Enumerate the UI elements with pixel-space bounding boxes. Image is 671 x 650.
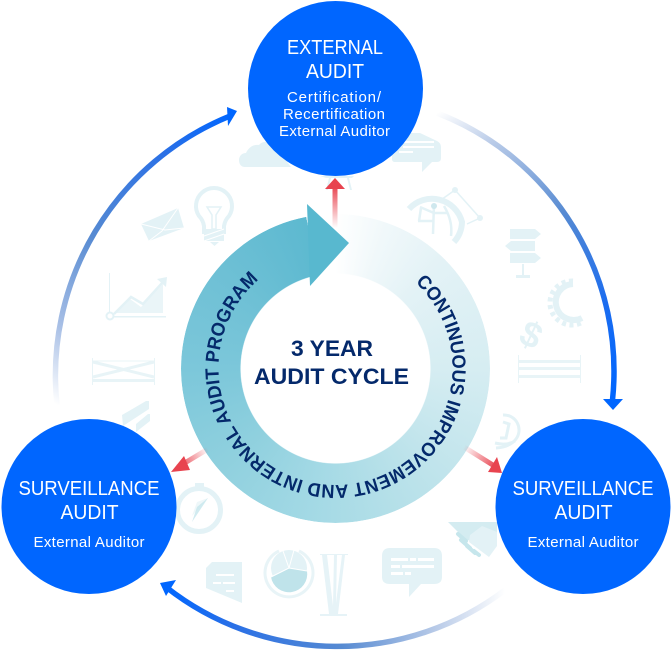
icon: compass — [178, 483, 220, 532]
center title — [254, 336, 409, 389]
panel: surveillance audit right circle: External Auditor — [528, 534, 638, 551]
panel: surveillance audit left circle: SURVEILLANCE — [18, 478, 160, 500]
arrow: right red — [464, 447, 502, 473]
panel: surveillance audit right circle: SURVEILLANCE — [512, 478, 654, 500]
icon: speech bubble top — [392, 133, 441, 172]
icon: column behind top arrow — [320, 176, 354, 190]
panel: external audit circle: Recertification — [283, 106, 385, 123]
icon: handshake — [448, 522, 497, 557]
panel: external audit circle: External Auditor — [279, 123, 390, 140]
gradient ring — [181, 214, 490, 523]
center title: AUDIT CYCLE — [254, 364, 409, 389]
arrow: top to right circle — [437, 113, 623, 410]
curved ring text: CONTINUOUS IMPROVEMENT AND INTERNAL AUDIT PROGRAM — [205, 270, 466, 498]
icon: crossed panel — [92, 358, 155, 385]
icon: document — [206, 562, 242, 603]
panel: surveillance audit left circle: External Auditor — [34, 534, 144, 551]
icon: pie chart — [265, 550, 313, 597]
icon: dollar: $ — [513, 312, 549, 357]
icon: lined column — [518, 355, 581, 383]
panel: surveillance audit right circle — [496, 419, 670, 594]
panel: surveillance audit left circle: AUDIT — [60, 502, 118, 524]
icon: coin at right — [495, 415, 519, 448]
panel: external audit circle: AUDIT — [306, 61, 364, 83]
icon: signpost — [505, 229, 541, 278]
panel: external audit circle: EXTERNAL — [287, 37, 383, 59]
panel: surveillance audit left circle — [2, 419, 176, 594]
arrow: left to top circle — [55, 107, 237, 405]
icon: envelope — [141, 208, 184, 241]
panel: surveillance audit right circle: AUDIT — [554, 502, 612, 524]
icon: gear — [550, 281, 583, 325]
icon: growth chart — [106, 273, 167, 320]
arrow: top red — [325, 178, 345, 228]
arrow: right to left circle along bottom — [160, 580, 505, 646]
icon: speech bubble bottom — [382, 548, 442, 597]
arrow: left red — [171, 449, 208, 472]
center title: 3 YEAR — [291, 336, 373, 361]
icon: pencil arrows — [122, 401, 150, 432]
ring arrowhead — [307, 204, 349, 286]
icon: cloud — [239, 142, 291, 167]
icon: column — [320, 554, 348, 616]
panel: external audit circle: Certification/ — [287, 89, 382, 106]
icon: light bulb — [196, 188, 232, 246]
icon: globe network — [409, 187, 483, 242]
panel: external audit circle — [248, 1, 423, 176]
